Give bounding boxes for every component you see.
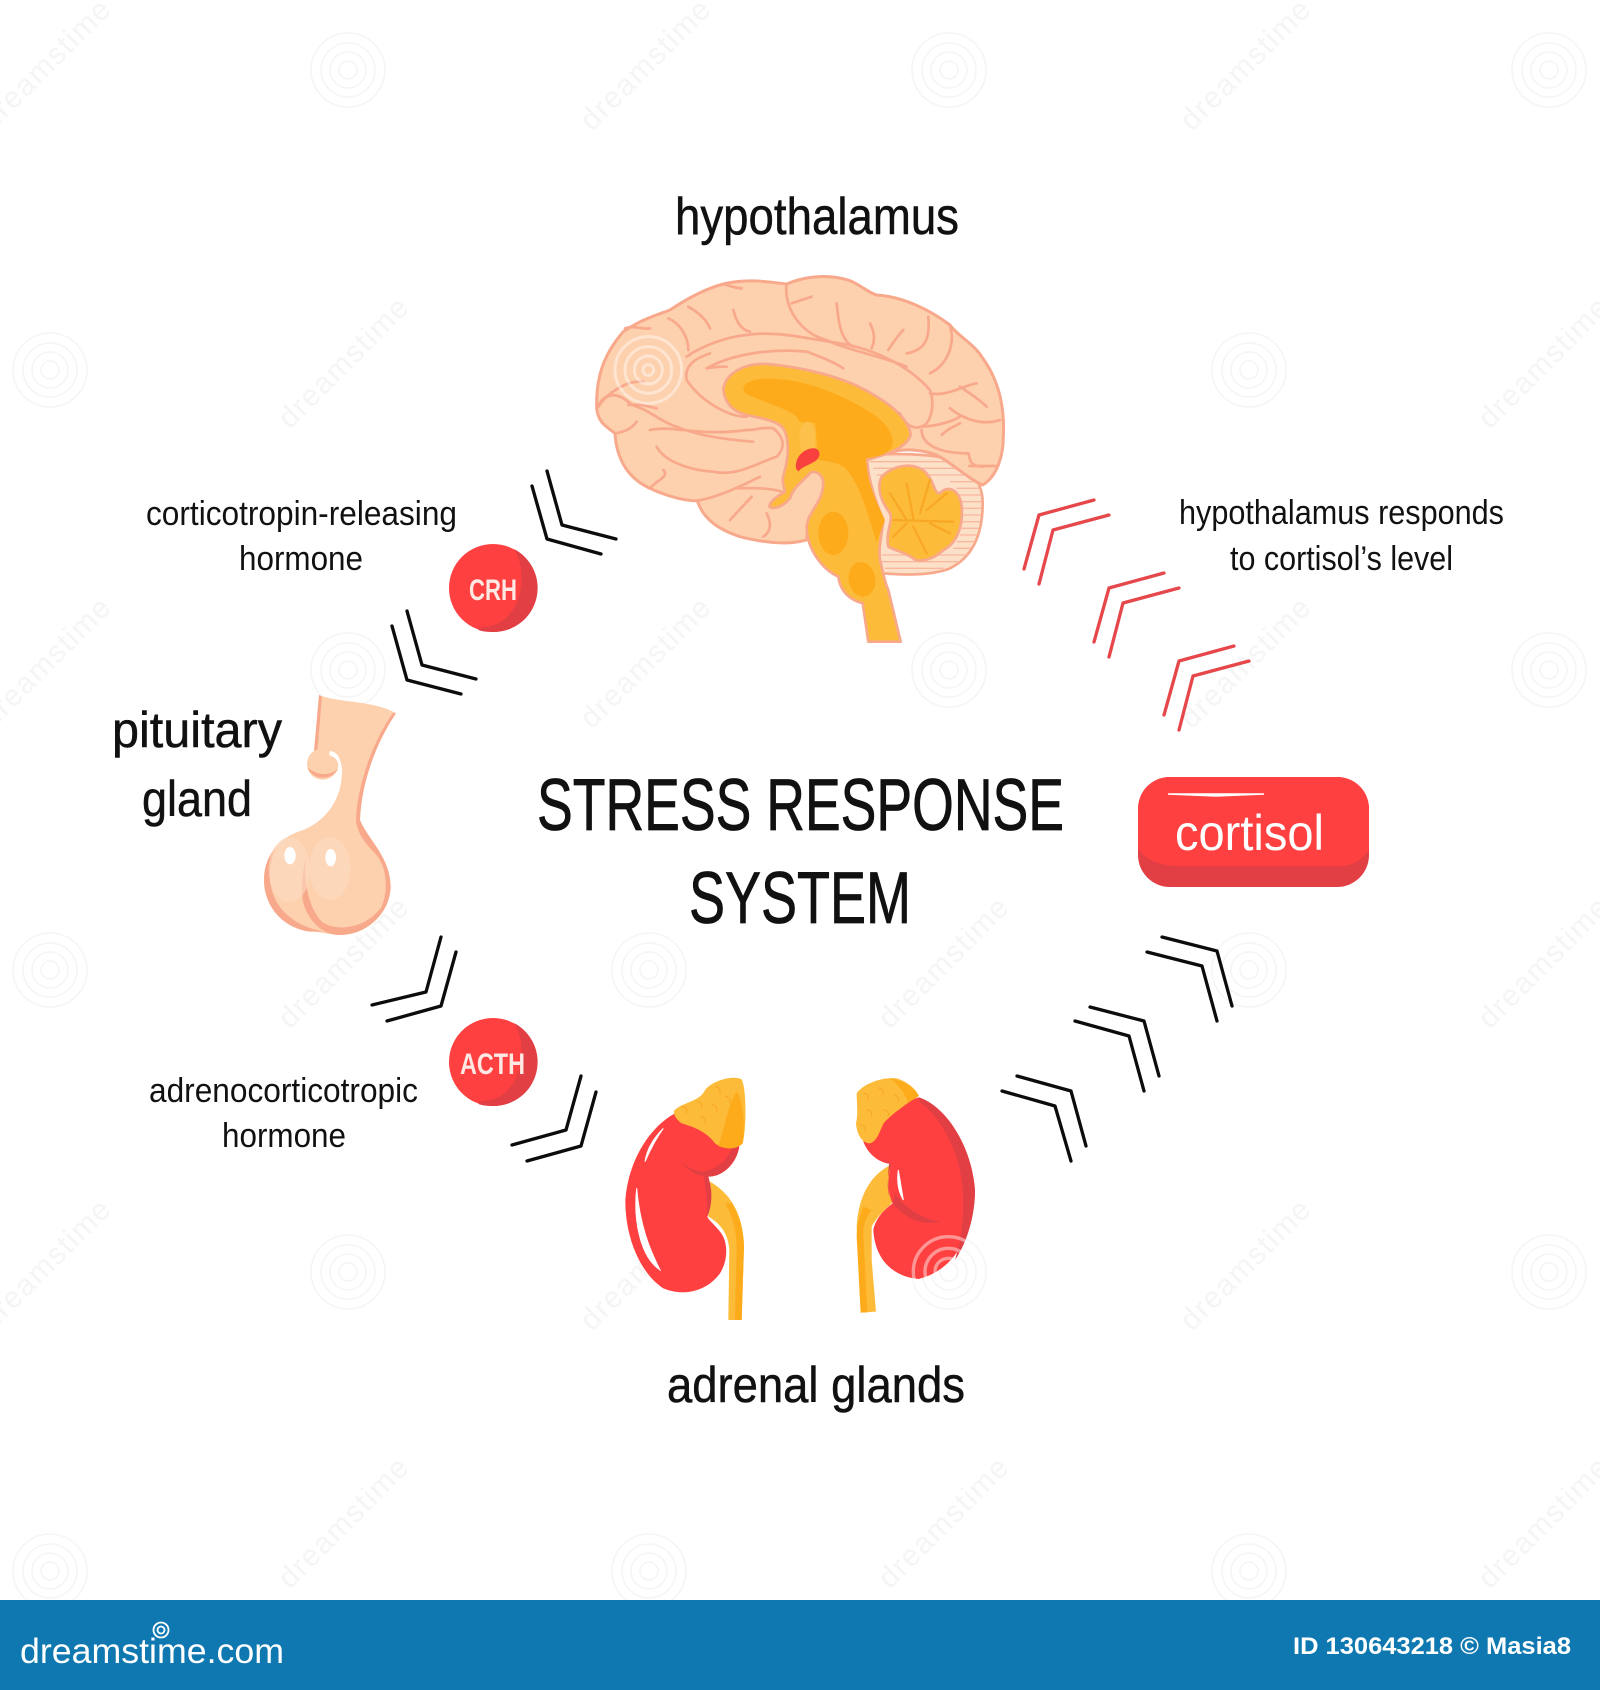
label: corticotropin-releasing hormone: corticotropin-releasing — [146, 495, 457, 533]
label: hypothalamus responds to cortisol's level: hypothalamus responds — [1179, 494, 1504, 532]
right kidney ureter — [857, 1165, 893, 1313]
label: adrenocorticotropic hormone: hormone — [222, 1117, 346, 1155]
watermark pattern: dreamstime — [272, 290, 416, 435]
badge: cortisol — [1138, 777, 1369, 887]
heading: adrenal glands: adrenal glands — [667, 1357, 965, 1413]
brain: sulci — [597, 284, 1000, 537]
arrows: ACTH to adrenal glands — [512, 1076, 596, 1161]
heading: pituitary gland — [112, 702, 282, 827]
brain: cerebrum — [597, 277, 1004, 543]
illustration: pituitary gland — [264, 695, 396, 935]
footer logo: dreamstime.com — [20, 1632, 284, 1671]
illustration: brain — [597, 277, 1004, 642]
badge: CRH: CRH — [469, 574, 517, 607]
left kidney ureter — [708, 1182, 744, 1320]
watermark pattern: dreamstime — [574, 1192, 718, 1337]
watermark over brain — [615, 337, 682, 403]
illustration: kidneys with adrenal glands — [625, 1078, 983, 1320]
watermark pattern: dreamstime — [872, 890, 1016, 1035]
footer bar — [0, 1600, 1600, 1690]
badge: ACTH: ACTH — [460, 1048, 525, 1081]
label: adrenocorticotropic hormone — [149, 1072, 418, 1155]
left kidney — [625, 1113, 739, 1292]
title: STRESS RESPONSE — [537, 765, 1064, 846]
watermark pattern: dreamstime — [1174, 590, 1318, 735]
brain: core dark orange — [743, 379, 893, 542]
label: corticotropin-releasing hormone — [146, 495, 457, 578]
watermark pattern: dreamstime — [1174, 1192, 1318, 1337]
arrows: adrenal glands to cortisol — [1002, 937, 1232, 1161]
title: SYSTEM — [689, 858, 911, 939]
right kidney — [863, 1097, 975, 1279]
arrows: CRH to pituitary — [392, 611, 476, 694]
heading: pituitary gland: pituitary — [112, 702, 282, 758]
footer credit: ID 130643218 © Masia8 — [1293, 1633, 1571, 1660]
left adrenal — [674, 1078, 746, 1148]
brain: brainstem nuclei — [818, 512, 878, 599]
watermark pattern: dreamstime — [872, 1450, 1016, 1595]
badge: cortisol: cortisol — [1175, 805, 1324, 861]
title — [537, 765, 1064, 939]
badge: CRH — [449, 544, 538, 632]
watermark over kidney — [913, 1237, 983, 1307]
label: hypothalamus responds to cortisol's level: to cortisol’s level — [1230, 540, 1453, 578]
brain: light highlight — [799, 422, 815, 455]
arrows: pituitary to ACTH — [372, 937, 456, 1021]
watermark pattern: dreamstime — [574, 590, 718, 735]
label: adrenocorticotropic hormone: adrenocorticotropic — [149, 1072, 418, 1110]
footer logo spiral — [154, 1622, 168, 1638]
right adrenal — [856, 1078, 919, 1143]
brain: core light yellow — [723, 364, 911, 642]
brain: red hypothalamus — [796, 448, 819, 472]
arrows: cortisol feedback to hypothalamus — [1024, 500, 1249, 730]
label: hypothalamus responds to cortisol's level — [1179, 494, 1504, 578]
arrows: hypothalamus to CRH — [532, 471, 616, 554]
badge: ACTH — [449, 1018, 538, 1106]
watermark pattern: dreamstime — [272, 1450, 416, 1595]
label: corticotropin-releasing hormone: hormone — [239, 540, 363, 578]
heading: pituitary gland: gland — [142, 771, 252, 827]
brain: cerebellum — [867, 454, 983, 575]
heading: hypothalamus: hypothalamus — [675, 188, 959, 246]
watermark pattern: dreamstime — [272, 890, 416, 1035]
